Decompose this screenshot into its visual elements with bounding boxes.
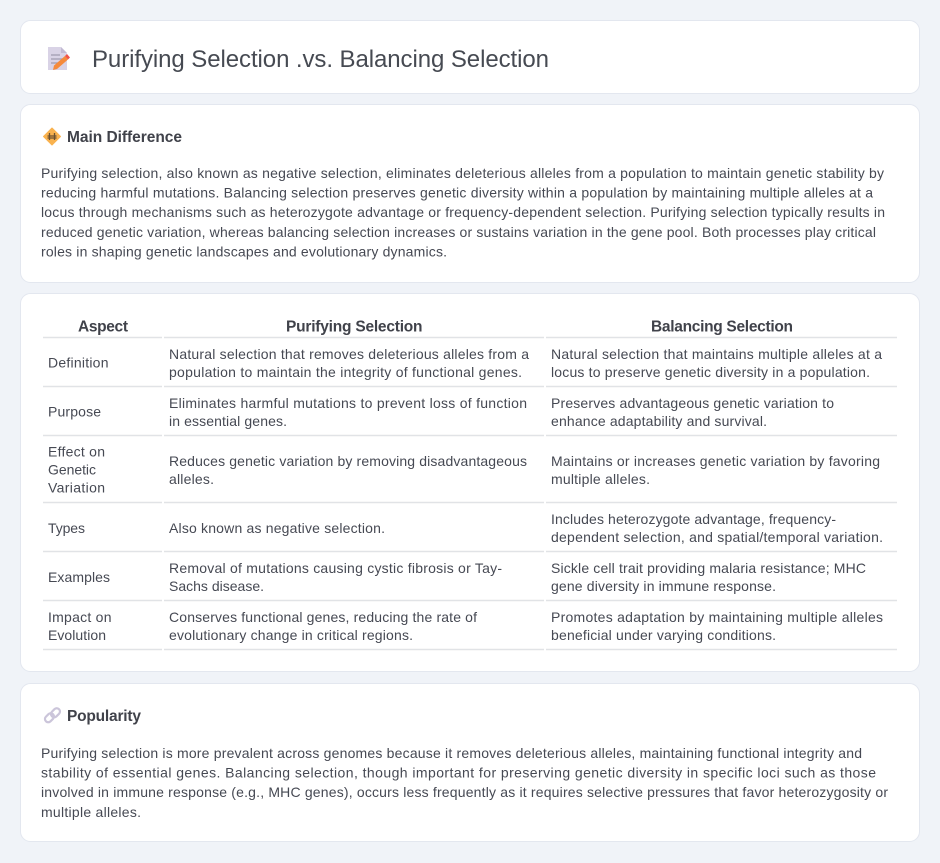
icon: link [44,707,61,724]
text block: popularity paragraph: multiple alleles. [41,804,141,820]
table row: definition: Natural selection that maintains multiple alleles at a [551,346,882,362]
text block: main difference paragraph: reduced genetic variation, whereas balancing selection increases or sustains variation in the gene pool. Both processes play critical [41,224,876,240]
table row: examples [48,560,866,594]
table row: purpose [48,395,834,429]
table row: examples: gene diversity in immune response. [551,578,776,594]
table row: examples: Examples [48,569,110,585]
table row: effect on genetic variation: Variation [48,480,105,496]
text block: popularity paragraph [41,745,888,820]
table row: effect on genetic variation: Effect on [48,444,105,460]
table row: types: Also known as negative selection. [169,520,385,536]
table row: definition: locus to preserve genetic diversity in a population. [551,364,870,380]
text block: main difference paragraph: reducing harmful mutations. Balancing selection preserves genetic diversity within a population by maintaining multiple alleles at a [41,185,873,201]
table header row [78,318,793,336]
table row: purpose: Eliminates harmful mutations to prevent loss of function [169,395,527,411]
table row: types: dependent selection, and spatial/temporal variation. [551,529,883,545]
table row: definition: Natural selection that removes deleterious alleles from a [169,346,529,362]
table row: definition: population to maintain the integrity of functional genes. [169,364,522,380]
table row: effect on genetic variation: Reduces genetic variation by removing disadvantageous [169,453,527,469]
text block: popularity paragraph: involved in immune response (e.g., MHC genes), occurs less frequently as it requires selective pressures that favor heterozygosity or [41,784,888,800]
text block: main difference paragraph: Purifying selection, also known as negative selection, eliminates deleterious alleles from a population to maintain genetic stability by [41,165,884,181]
table header row: Purifying Selection [286,318,422,336]
table row: definition [48,346,882,380]
table row: impact on evolution: Evolution [48,627,106,643]
table row: purpose: in essential genes. [169,413,287,429]
table row: effect on genetic variation: Maintains or increases genetic variation by favoring [551,453,880,469]
table row: purpose: Purpose [48,404,101,420]
table row: impact on evolution: evolutionary change in critical regions. [169,627,413,643]
icon: warning diamond [44,128,60,145]
table row: effect on genetic variation: multiple alleles. [551,471,650,487]
table row: effect on genetic variation [48,444,880,496]
table row: impact on evolution: Impact on [48,609,112,625]
table row: examples: Sickle cell trait providing malaria resistance; MHC [551,560,866,576]
table row: effect on genetic variation: alleles. [169,471,214,487]
table row: examples: Removal of mutations causing cystic fibrosis or Tay- [169,560,502,576]
table row: effect on genetic variation: Genetic [48,462,96,478]
text block: main difference paragraph: locus through mechanisms such as heterozygote advantage or frequency-dependent selection. Purifying selection typically results in [41,204,885,220]
text block: main difference paragraph: roles in shaping genetic landscapes and evolutionary dynamics. [41,243,447,259]
text block: main difference paragraph [41,165,885,259]
table row: types [48,511,883,545]
table row: purpose: enhance adaptability and survival. [551,413,767,429]
table header row: Balancing Selection [651,318,793,336]
table row: impact on evolution: Conserves functional genes, reducing the rate of [169,609,477,625]
heading: main difference: Main Difference [67,129,182,146]
table row: purpose: Preserves advantageous genetic variation to [551,395,834,411]
table row: impact on evolution: beneficial under varying conditions. [551,627,776,643]
panel: popularity [20,684,920,842]
table header row: Aspect [78,318,128,336]
table row: impact on evolution: Promotes adaptation by maintaining multiple alleles [551,609,883,625]
table row: definition: Definition [48,355,108,371]
table row: examples: Sachs disease. [169,578,264,594]
text block: popularity paragraph: Purifying selection is more prevalent across genomes because it removes deleterious alleles, maintaining functional integrity and [41,745,862,761]
icon: document with pencil [48,47,70,70]
text block: popularity paragraph: stability of essential genes. Balancing selection, though important for preserving genetic diversity in specific loci such as those [41,765,876,781]
panel: title header [20,20,920,94]
table row: types: Includes heterozygote advantage, frequency- [551,511,836,527]
panel: main difference [20,104,920,282]
heading: popularity: Popularity [67,708,141,725]
title: Purifying Selection .vs. Balancing Selection [92,46,549,73]
panel: comparison table [20,294,920,672]
table row: types: Types [48,520,85,536]
table row: impact on evolution [48,609,883,643]
